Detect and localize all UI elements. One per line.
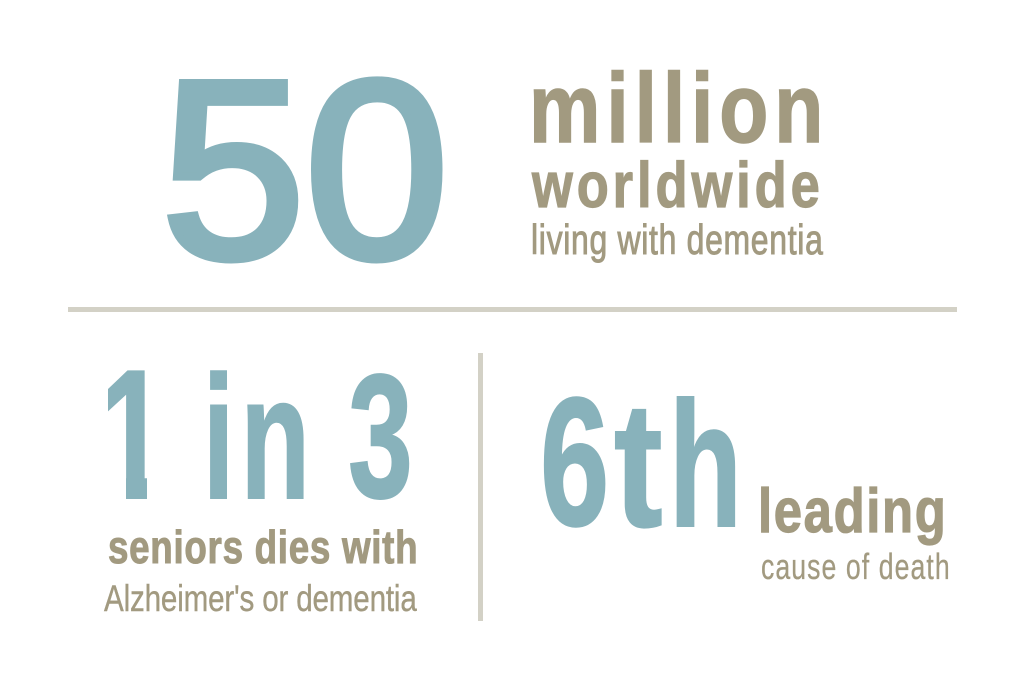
panel: 6th leading cause of death (540, 360, 950, 587)
big number: 1 in 3: in (203, 340, 310, 536)
big number: 6th: 6 (540, 360, 609, 565)
big number: 50: 50 (162, 28, 448, 311)
text: cause of death: cause of death (761, 546, 950, 587)
text: living with dementia: living with dementia (531, 216, 823, 263)
heading: million: million (529, 53, 823, 163)
big number: 1 in 3 (108, 370, 410, 500)
vertical divider (478, 353, 483, 621)
subheading: leading: leading (758, 477, 946, 546)
big number: 1 in 3: 1 (98, 333, 167, 538)
panel: 50 million worldwide (162, 28, 823, 311)
text: Alzheimer's or dementia: Alzheimer's or dementia (104, 579, 417, 620)
subheading: worldwide: worldwide (531, 150, 820, 221)
big number: 1 in 3: 3 (348, 338, 413, 535)
big number: 6th: h (669, 366, 742, 565)
subheading: seniors dies with: seniors dies with (108, 521, 418, 573)
big number: 6th: t (614, 366, 663, 564)
big number: 6th (540, 360, 742, 565)
infographic (68, 70, 957, 621)
horizontal divider (68, 307, 957, 312)
panel: 1 in 3 seniors (104, 370, 417, 612)
